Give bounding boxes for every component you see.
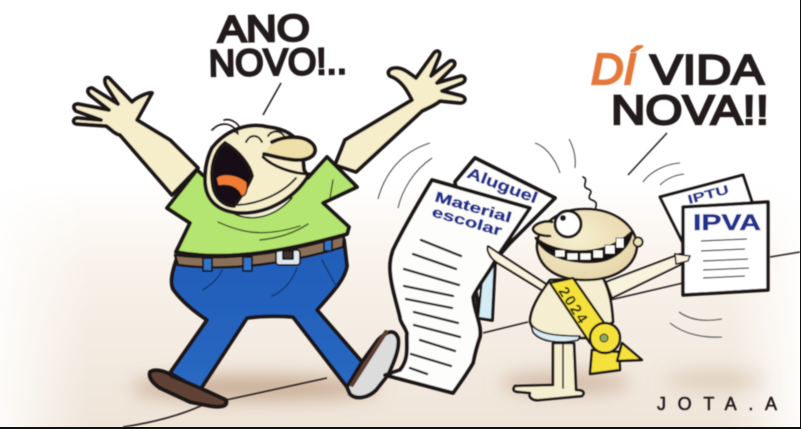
paper lines xyxy=(404,240,461,374)
paper: Aluguel xyxy=(455,158,555,320)
paper: blue underside xyxy=(478,260,495,320)
ground line xyxy=(123,252,800,427)
baby: right arm xyxy=(606,254,688,298)
man: shirt folds xyxy=(218,180,333,240)
man: tongue xyxy=(216,175,247,196)
text: IPVA: IPVA xyxy=(693,210,761,235)
baby: nose xyxy=(533,221,552,236)
text: Material: Material xyxy=(433,189,513,227)
baby: left arm xyxy=(487,246,552,294)
text: 2024: 2024 xyxy=(555,284,591,327)
baby: right hand xyxy=(675,254,690,264)
speech: DI VIDA NOVA xyxy=(591,45,769,133)
ground shadows xyxy=(130,371,765,401)
baby: head xyxy=(537,209,637,280)
baby xyxy=(487,177,688,400)
man: neck and head xyxy=(205,126,308,213)
baby: eye xyxy=(555,211,581,237)
speech line: man xyxy=(263,83,281,115)
man: belt xyxy=(175,236,344,267)
man: jaw line xyxy=(238,178,296,205)
speech: DI VIDA NOVA: NOVA!! xyxy=(611,87,769,133)
signature: JOTA.A xyxy=(657,394,777,414)
text: escolar: escolar xyxy=(430,204,504,240)
sash: band xyxy=(550,278,607,343)
sash: tails xyxy=(590,350,620,374)
motion lines: man xyxy=(378,143,432,208)
paper: IPTU xyxy=(660,175,752,243)
baby: hair squiggle xyxy=(583,177,596,210)
paper: Material escolar xyxy=(385,180,530,393)
man: hair strands xyxy=(212,120,240,136)
man: closed eyes xyxy=(246,132,284,142)
man: nose xyxy=(264,137,315,160)
man: lip curve xyxy=(263,157,310,174)
man: left arm and hand xyxy=(74,77,198,195)
speech line: baby xyxy=(628,133,667,175)
sash: rosette xyxy=(590,323,620,353)
IPVA lines xyxy=(701,239,749,278)
sash xyxy=(550,278,642,374)
baby: body xyxy=(530,278,613,338)
man: right arm and hand xyxy=(335,51,465,172)
man: collar xyxy=(222,190,292,218)
baby: mouth with teeth xyxy=(536,232,632,262)
motion lines: baby xyxy=(535,139,722,337)
text: IPTU: IPTU xyxy=(686,183,730,207)
speech: DI VIDA NOVA: VIDA xyxy=(650,46,764,93)
man: jeans xyxy=(170,240,362,390)
speech: ANO NOVO: NOVO!.. xyxy=(208,41,347,84)
speech: DI VIDA NOVA: DÍ xyxy=(591,45,642,94)
baby: legs and feet xyxy=(514,343,584,400)
man: mouth xyxy=(212,143,252,206)
man: belt loops and buckle xyxy=(203,238,332,271)
speech: ANO NOVO xyxy=(208,7,347,84)
man: right shoe xyxy=(347,332,398,397)
paper: IPVA xyxy=(683,202,768,295)
text: Aluguel: Aluguel xyxy=(465,165,540,207)
man: shirt xyxy=(167,157,357,256)
man xyxy=(74,51,465,407)
baby: diaper xyxy=(531,324,580,342)
man: jeans details xyxy=(203,260,336,296)
baby: ear xyxy=(634,238,642,246)
man: left shoe xyxy=(150,370,226,407)
speech: ANO NOVO: ANO xyxy=(217,7,310,50)
